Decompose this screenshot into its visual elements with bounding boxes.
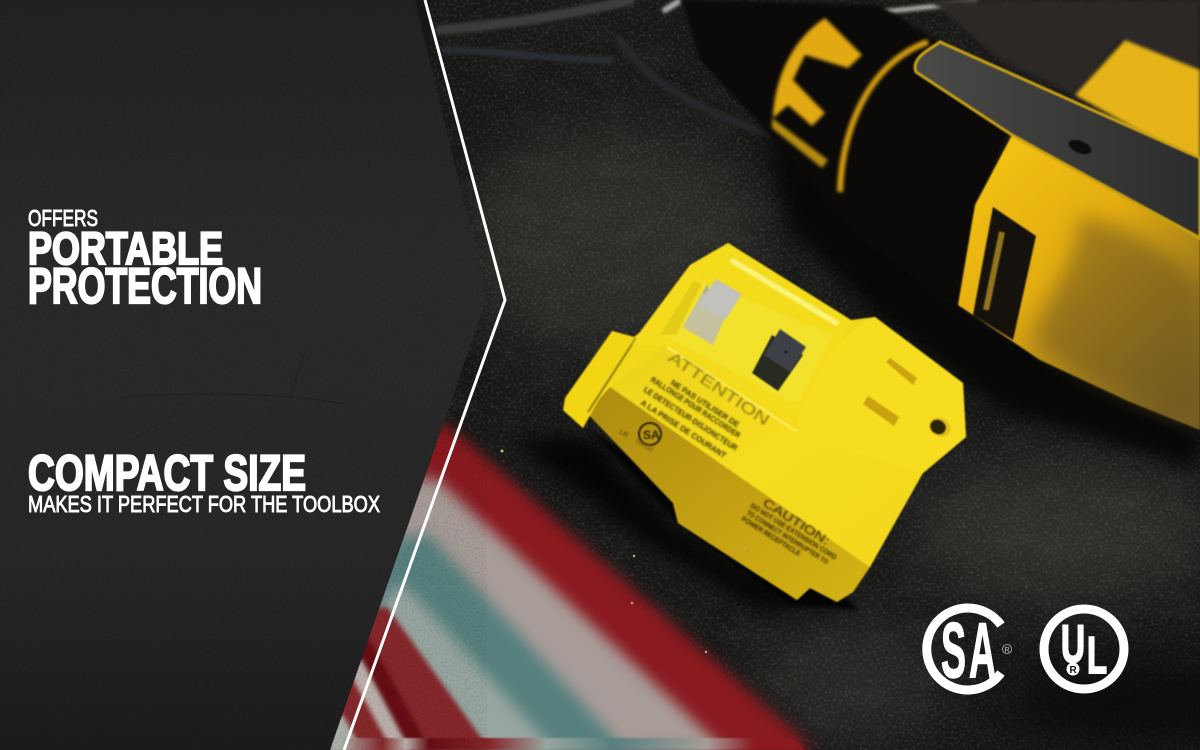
- workbench surface: [430, 0, 1200, 750]
- text: PROTECTION: PROTECTION: [28, 258, 262, 314]
- CSA mark on adapter: SA: [643, 428, 660, 442]
- shadow under adapter: [510, 435, 860, 612]
- logo: UL certification: R: [1070, 665, 1078, 676]
- French warning text: LE DETECTEUR-DISJONCTEUR: [642, 385, 739, 453]
- adapter top face: [632, 243, 850, 346]
- adapter socket face: [875, 317, 966, 473]
- adapter recess: [665, 278, 832, 402]
- drill dirt mark: [1035, 215, 1200, 425]
- background cables: [440, 0, 975, 135]
- drill grip hole: [1068, 139, 1092, 155]
- recess shaded wall: [660, 280, 702, 335]
- logo: CSA certification: [927, 606, 1012, 694]
- socket ground hole: [929, 417, 951, 437]
- logo: UL certification: U: [1061, 615, 1085, 674]
- adapter ridge highlight: [729, 258, 840, 326]
- CSA mark on adapter: 68658: [634, 438, 654, 454]
- white chevron outline arrow: [344, 0, 505, 750]
- heading: offers portable protection: [28, 205, 262, 314]
- French warning text: NE PAS UTILISER DE: [669, 378, 741, 430]
- French warning text: A LA PRISE DE COURANT: [639, 398, 728, 460]
- label text: ATTENTION: ATTENTION: [665, 349, 772, 429]
- hood highlight: [667, 347, 796, 431]
- shadow below drill: [760, 120, 1200, 470]
- text: MAKES IT PERFECT FOR THE TOOLBOX: MAKES IT PERFECT FOR THE TOOLBOX: [28, 491, 380, 517]
- logo: UL certification: L: [1087, 627, 1107, 685]
- dust specks: [500, 450, 746, 653]
- photo background: workbench with drill and GFCI adapter: [330, 0, 1200, 750]
- gap between tab and body: [588, 338, 636, 412]
- French warning text: RALLONGE POUR RACCORDER: [649, 375, 742, 440]
- text: COMPACT SIZE: COMPACT SIZE: [28, 445, 306, 501]
- reset button: [752, 329, 806, 391]
- logo: CSA certification: R: [1004, 647, 1010, 654]
- text: OFFERS: OFFERS: [28, 205, 98, 231]
- socket slot lower: [863, 396, 899, 426]
- logo: CSA certification: A: [969, 606, 996, 694]
- socket slot upper: [886, 358, 917, 385]
- test button: [683, 279, 742, 345]
- logo: CSA certification: S: [941, 606, 966, 694]
- CAUTION label text: TO CONNECT INTERRUPTER TO: [745, 510, 830, 566]
- drill yellow housing: [958, 135, 1200, 430]
- adapter side tab: [563, 331, 634, 428]
- CSA mark on adapter: LR: [618, 429, 629, 439]
- drill battery: [1075, 40, 1200, 165]
- drill in background: [682, 0, 1200, 430]
- top right background: [930, 0, 1200, 95]
- text: PORTABLE: PORTABLE: [28, 223, 223, 274]
- blurred foreground stripes: [320, 420, 815, 750]
- adapter base silhouette: [563, 243, 966, 602]
- logo: UL certification: [1044, 609, 1124, 689]
- adapter lower housing: [587, 387, 870, 602]
- drill black body: [682, 0, 1010, 305]
- CAUTION label text: CAUTION:: [760, 496, 832, 548]
- dark chevron panel: [0, 0, 487, 750]
- drill grey grip strip: [915, 42, 1200, 238]
- CAUTION label text: POWER RECEPTACLE: [740, 516, 802, 558]
- heading: compact size: [28, 445, 380, 517]
- drill collar: [772, 18, 928, 192]
- CSA mark on adapter: [618, 423, 661, 454]
- yellow GFCI adapter: [563, 243, 966, 602]
- CAUTION label text: DO NOT USE EXTENSION CORD: [749, 503, 837, 562]
- drill black label: [973, 207, 1036, 340]
- adapter front label face: [870, 473, 923, 566]
